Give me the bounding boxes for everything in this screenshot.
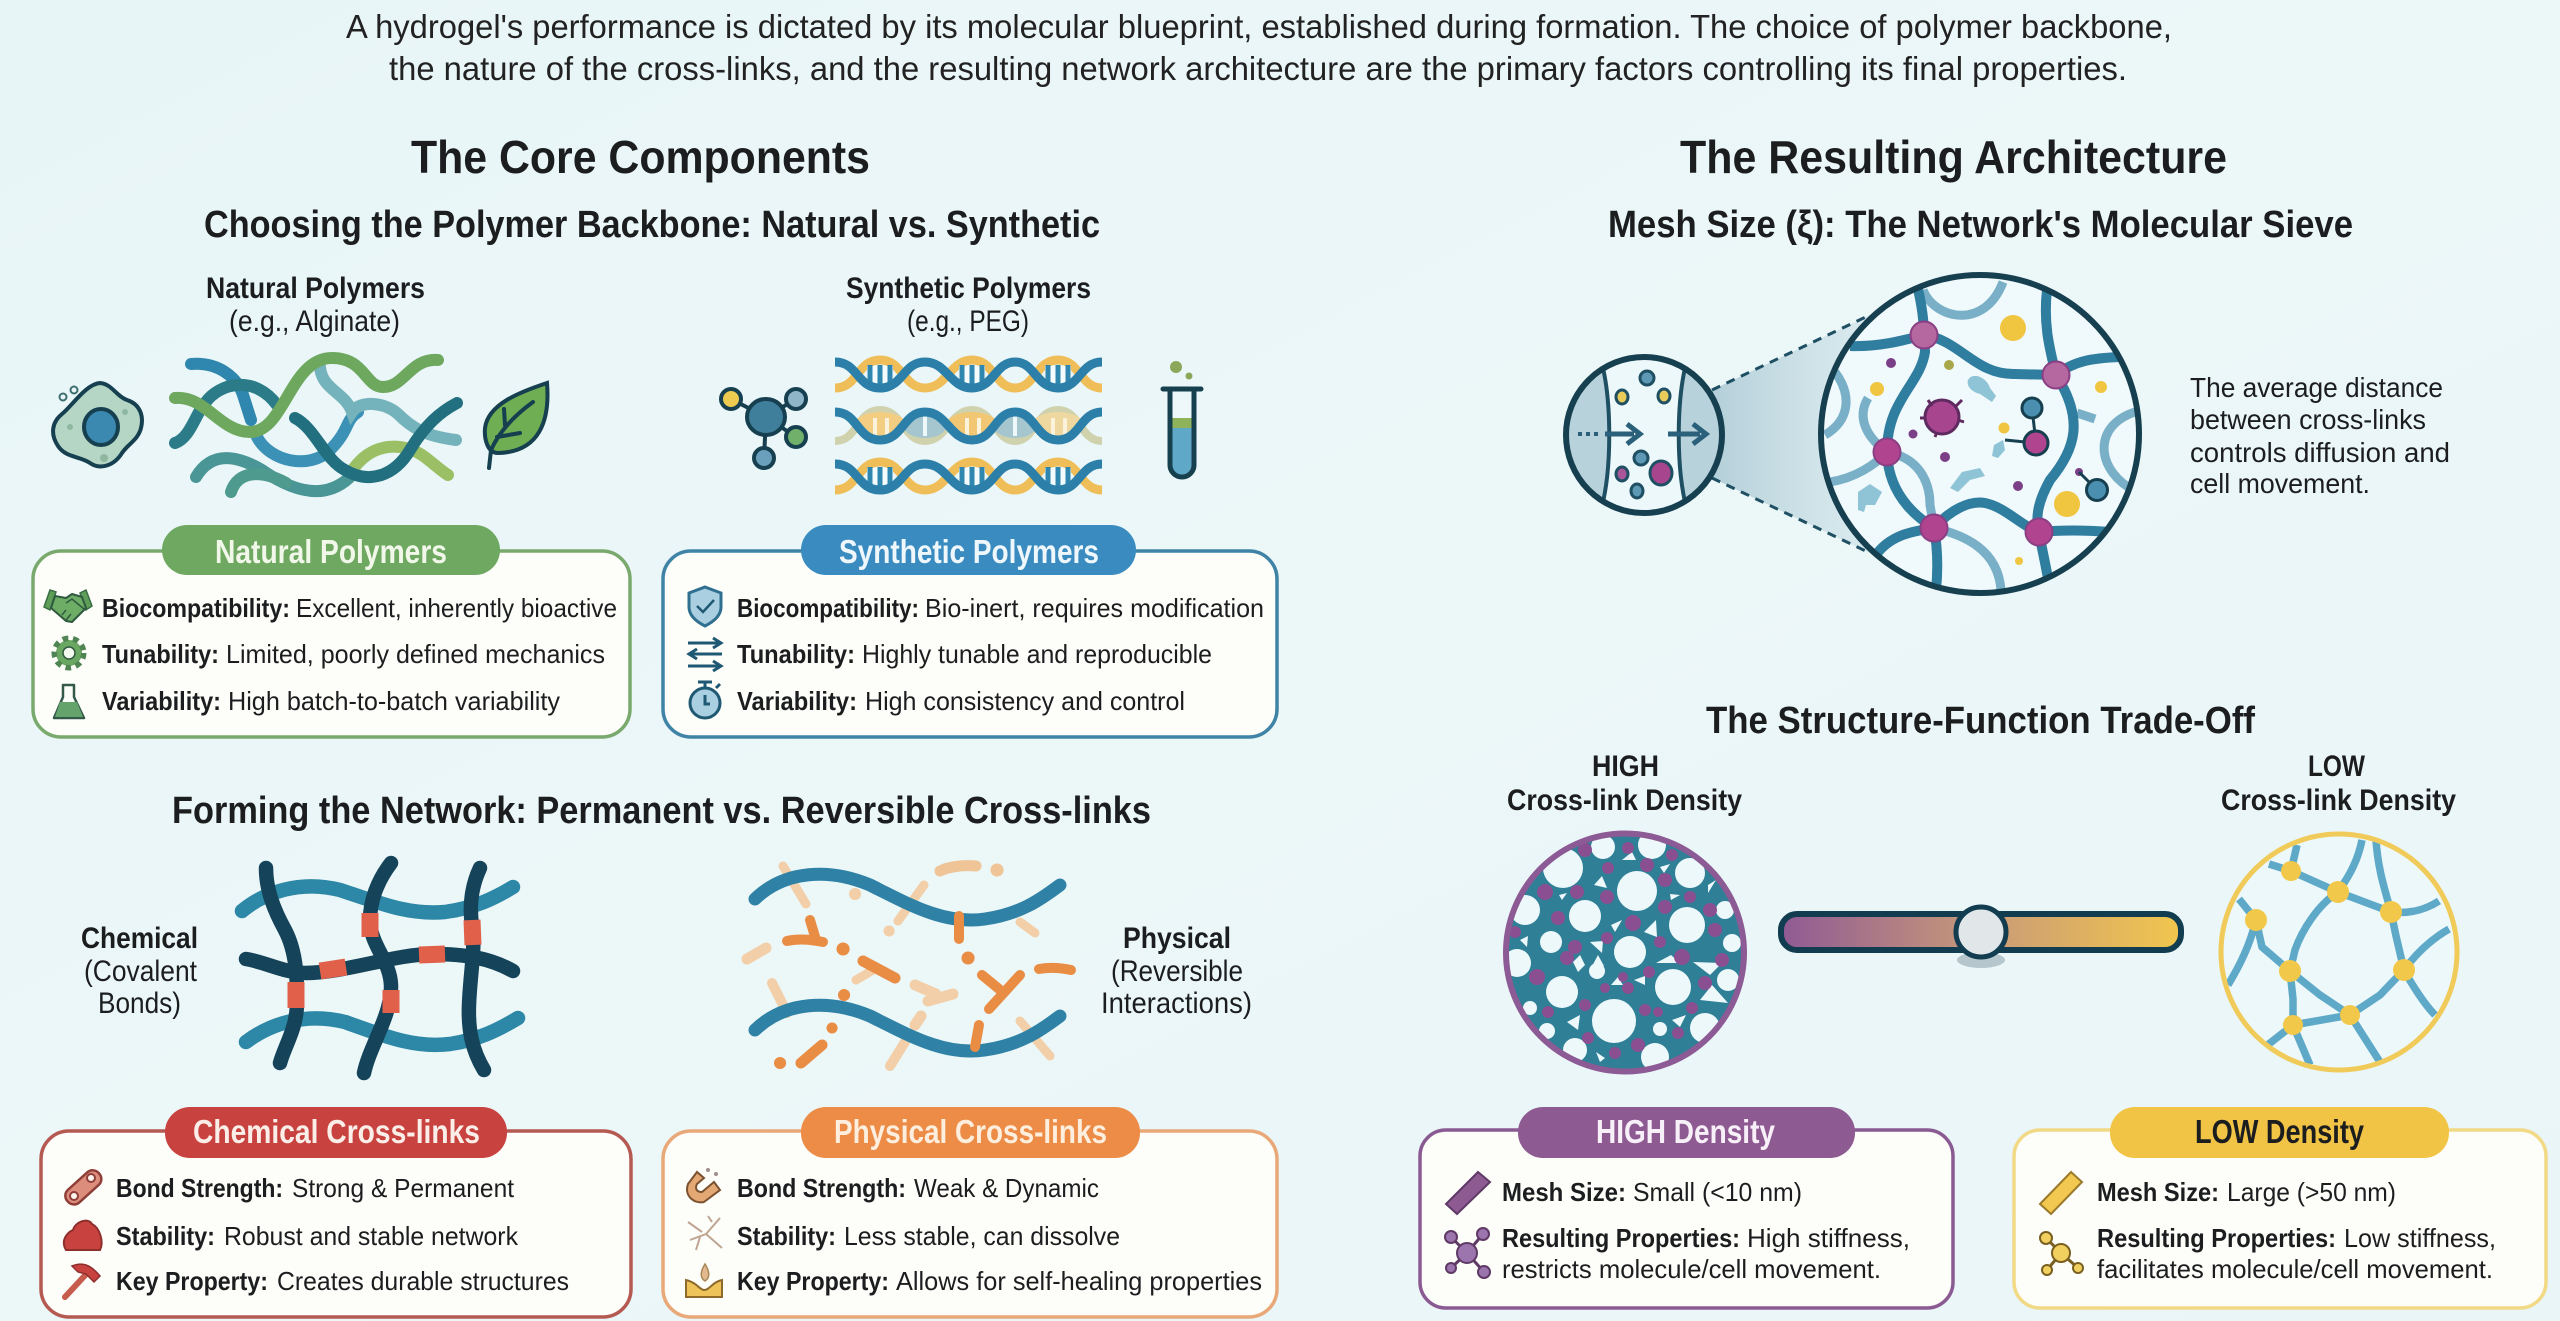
row: key property: Allows for self-healing properties — [896, 1266, 1262, 1296]
natural polymer strands — [175, 358, 457, 492]
row: tunability: Tunability: — [102, 639, 219, 669]
pill: physical cross-links: Physical Cross-links — [834, 1113, 1107, 1150]
sparse network circle — [2221, 834, 2457, 1070]
row: key property — [737, 1266, 1262, 1296]
row: key property: Key Property: — [737, 1266, 889, 1296]
row: bond strength — [737, 1173, 1099, 1203]
row: bond strength: Weak & Dynamic — [914, 1173, 1099, 1203]
pill: chemical cross-links — [165, 1107, 507, 1158]
row: biocompatibility: Biocompatibility: — [737, 593, 919, 623]
row: tunability: Tunability: — [737, 639, 855, 669]
pill: natural polymers: Natural Polymers — [215, 533, 447, 570]
icon: flask — [54, 685, 84, 718]
row: tunability: Limited, poorly defined mechanics — [226, 639, 605, 669]
icon: hammer — [65, 1264, 100, 1297]
row: stability: Stability: — [116, 1221, 215, 1251]
physical network — [747, 866, 1071, 1066]
row: resulting properties: facilitates molecule/cell movement. — [2097, 1254, 2493, 1284]
row: stability — [737, 1221, 1120, 1251]
label: low density: LOW — [2308, 750, 2366, 783]
pill: synthetic polymers — [801, 525, 1136, 575]
icon: ruler — [2040, 1172, 2082, 1214]
label: physical — [1101, 922, 1252, 1020]
pill: physical cross-links — [801, 1107, 1140, 1158]
mesh description: controls diffusion and — [2190, 437, 2450, 468]
icon: ruler — [1446, 1172, 1490, 1214]
panel: high density — [1420, 1107, 1953, 1308]
icon: stopwatch — [690, 682, 720, 718]
icon: handshake — [44, 590, 92, 622]
label: Natural Polymers — [206, 272, 425, 338]
row: bond strength — [116, 1173, 515, 1203]
row: mesh size: Mesh Size: — [2097, 1177, 2219, 1207]
panel: natural polymers — [33, 525, 630, 737]
row: mesh size — [2097, 1177, 2396, 1207]
row: bond strength: Bond Strength: — [116, 1173, 283, 1203]
row: biocompatibility — [102, 593, 617, 623]
row: key property: Creates durable structures — [277, 1266, 569, 1296]
row: resulting properties: High stiffness, — [1747, 1223, 1910, 1253]
label: low density — [2221, 750, 2456, 817]
row: variability — [737, 686, 1185, 716]
icon: gear — [56, 640, 82, 666]
label: Natural Polymers: (e.g., Alginate) — [229, 305, 400, 338]
row: biocompatibility: Bio-inert, requires modification — [925, 593, 1264, 623]
row: resulting properties: Resulting Properties: — [2097, 1223, 2336, 1253]
row: key property — [116, 1266, 569, 1296]
subheading: polymer backbone: Choosing the Polymer Backbone: Natural vs. Synthetic — [204, 204, 1100, 246]
icon: cell — [53, 383, 142, 466]
heading: The Resulting Architecture: The Resulting Architecture — [1680, 131, 2227, 183]
row: bond strength: Bond Strength: — [737, 1173, 906, 1203]
magnification cone — [1712, 315, 1870, 553]
mesh description: between cross-links — [2190, 404, 2426, 435]
mesh description: cell movement. — [2190, 468, 2370, 499]
row: biocompatibility: Excellent, inherently bioactive — [296, 593, 617, 623]
intro text — [346, 8, 2172, 87]
panel: physical cross-links — [663, 1107, 1277, 1317]
row: resulting properties: Resulting Properties: — [1502, 1223, 1740, 1253]
icon: arrows — [688, 638, 722, 671]
icon: cracks — [688, 1216, 722, 1250]
row: mesh size: Small (<10 nm) — [1633, 1177, 1802, 1207]
pill: high density: HIGH Density — [1596, 1113, 1776, 1150]
label: chemical: Bonds) — [98, 987, 181, 1020]
row: mesh size: Mesh Size: — [1502, 1177, 1626, 1207]
row: stability: Stability: — [737, 1221, 836, 1251]
row: stability: Robust and stable network — [224, 1221, 519, 1251]
row: variability: Variability: — [737, 686, 857, 716]
row: resulting properties: restricts molecule/cell movement. — [1502, 1254, 1881, 1284]
label: low density: Cross-link Density — [2221, 784, 2456, 817]
icon: self-healing — [686, 1264, 722, 1297]
pill: high density — [1518, 1107, 1855, 1158]
row: variability: Variability: — [102, 686, 221, 716]
intro text: A hydrogel's performance is dictated by its molecular blueprint, established during formation. The choice of polymer backbone, — [346, 8, 2172, 45]
pill: natural polymers — [162, 525, 500, 575]
icon: rock — [64, 1221, 102, 1250]
density slider — [1781, 907, 2181, 968]
magnified mesh view — [1821, 275, 2139, 593]
heading: The Core Components: The Core Components — [411, 131, 870, 183]
panel: chemical cross-links — [41, 1107, 631, 1317]
row: resulting properties — [2097, 1223, 2496, 1284]
icon: molecule — [2040, 1232, 2083, 1275]
row: biocompatibility — [737, 593, 1264, 623]
panel: low density — [2014, 1107, 2546, 1308]
icon: chain link — [62, 1167, 105, 1208]
mesh description: The average distance — [2190, 372, 2443, 403]
row: key property: Key Property: — [116, 1266, 268, 1296]
row: tunability: Highly tunable and reproducible — [862, 639, 1212, 669]
pill: low density — [2110, 1107, 2449, 1158]
label: chemical — [81, 922, 198, 1020]
row: biocompatibility: Biocompatibility: — [102, 593, 290, 623]
subheading: cross-links: Forming the Network: Permanent vs. Reversible Cross-links — [172, 790, 1151, 832]
small hydrogel view — [1566, 357, 1722, 513]
row: mesh size — [1502, 1177, 1802, 1207]
chemical network — [242, 863, 518, 1073]
row: stability: Less stable, can dissolve — [844, 1221, 1120, 1251]
label: Synthetic Polymers: Synthetic Polymers — [846, 272, 1091, 305]
label: physical: Interactions) — [1101, 987, 1252, 1020]
pill: synthetic polymers: Synthetic Polymers — [839, 533, 1099, 570]
label: Synthetic Polymers: (e.g., PEG) — [907, 305, 1029, 338]
mesh description — [2190, 372, 2450, 499]
row: bond strength: Strong & Permanent — [292, 1173, 515, 1203]
subheading: trade-off: The Structure-Function Trade-Off — [1706, 700, 2255, 742]
label: Synthetic Polymers — [846, 272, 1091, 338]
row: resulting properties — [1502, 1223, 1910, 1284]
row: variability: High batch-to-batch variability — [228, 686, 560, 716]
dense network circle — [1503, 831, 1745, 1072]
row: resulting properties: Low stiffness, — [2344, 1223, 2496, 1253]
intro text: the nature of the cross-links, and the resulting network architecture are the primary factors controlling its final properties. — [389, 50, 2127, 87]
panel: synthetic polymers — [663, 525, 1277, 737]
row: variability: High consistency and control — [865, 686, 1185, 716]
row: mesh size: Large (>50 nm) — [2227, 1177, 2396, 1207]
pill: low density: LOW Density — [2195, 1113, 2365, 1150]
icon: molecule — [721, 389, 806, 468]
synthetic polymer helices — [835, 360, 1102, 490]
label: chemical: (Covalent — [84, 955, 198, 988]
label: physical: Physical — [1123, 922, 1231, 955]
icon: molecule — [1445, 1228, 1490, 1278]
icon: test tube — [1163, 361, 1201, 477]
label: high density: Cross-link Density — [1507, 784, 1742, 817]
subheading: mesh size: Mesh Size (ξ): The Network's Molecular Sieve — [1608, 204, 2353, 246]
label: chemical: Chemical — [81, 922, 198, 955]
label: high density: HIGH — [1592, 750, 1659, 783]
label: Natural Polymers: Natural Polymers — [206, 272, 425, 305]
icon: shield — [689, 587, 721, 626]
icon: leaf — [485, 383, 547, 468]
icon: magnet — [687, 1168, 720, 1202]
label: high density — [1507, 750, 1742, 817]
pill: chemical cross-links: Chemical Cross-links — [193, 1113, 480, 1150]
label: physical: (Reversible — [1111, 955, 1243, 988]
